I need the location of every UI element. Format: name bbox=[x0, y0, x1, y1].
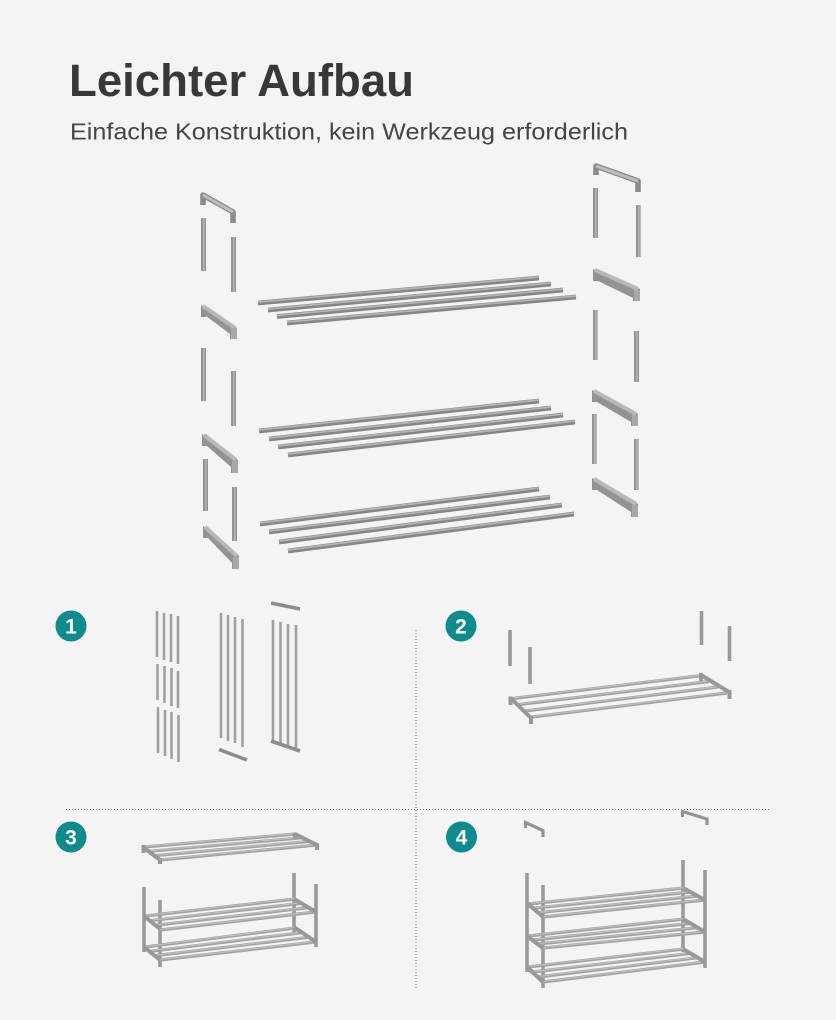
long rods with bracket bbox=[219, 613, 247, 760]
step 2 badge bbox=[446, 610, 476, 642]
dotted divider: horizontal bbox=[66, 808, 770, 810]
step 4 badge bbox=[446, 822, 477, 852]
three-tier rack bbox=[527, 860, 705, 988]
subtitle: Einfache Konstruktion, kein Werkzeug erforderlich bbox=[70, 118, 628, 144]
step 1 badge: 1 bbox=[65, 616, 77, 638]
short rods group bbox=[157, 611, 178, 762]
assembled side frame bbox=[271, 603, 300, 751]
step 3 badge bbox=[56, 822, 86, 852]
top shelf rods bbox=[258, 277, 576, 323]
step 3 drawing bbox=[143, 833, 317, 967]
left frame parts bbox=[201, 195, 239, 569]
step 1 parts bbox=[157, 603, 300, 762]
middle shelf rods bbox=[259, 400, 575, 455]
step 4 badge: 4 bbox=[456, 826, 468, 850]
step 4 drawing bbox=[526, 812, 707, 988]
bottom shelf rods bbox=[260, 488, 574, 551]
top caps bbox=[526, 812, 707, 837]
right frame parts bbox=[592, 166, 641, 517]
step 3 badge: 3 bbox=[65, 826, 77, 850]
step 2 drawing bbox=[510, 611, 730, 724]
shelf being placed bbox=[143, 833, 317, 864]
title: Leichter Aufbau bbox=[69, 55, 414, 106]
two-tier rack bbox=[144, 873, 316, 967]
exploded rack diagram bbox=[201, 166, 641, 569]
step 2 badge: 2 bbox=[455, 616, 467, 638]
dotted divider: vertical bbox=[415, 630, 417, 990]
step 1 badge bbox=[56, 610, 86, 642]
